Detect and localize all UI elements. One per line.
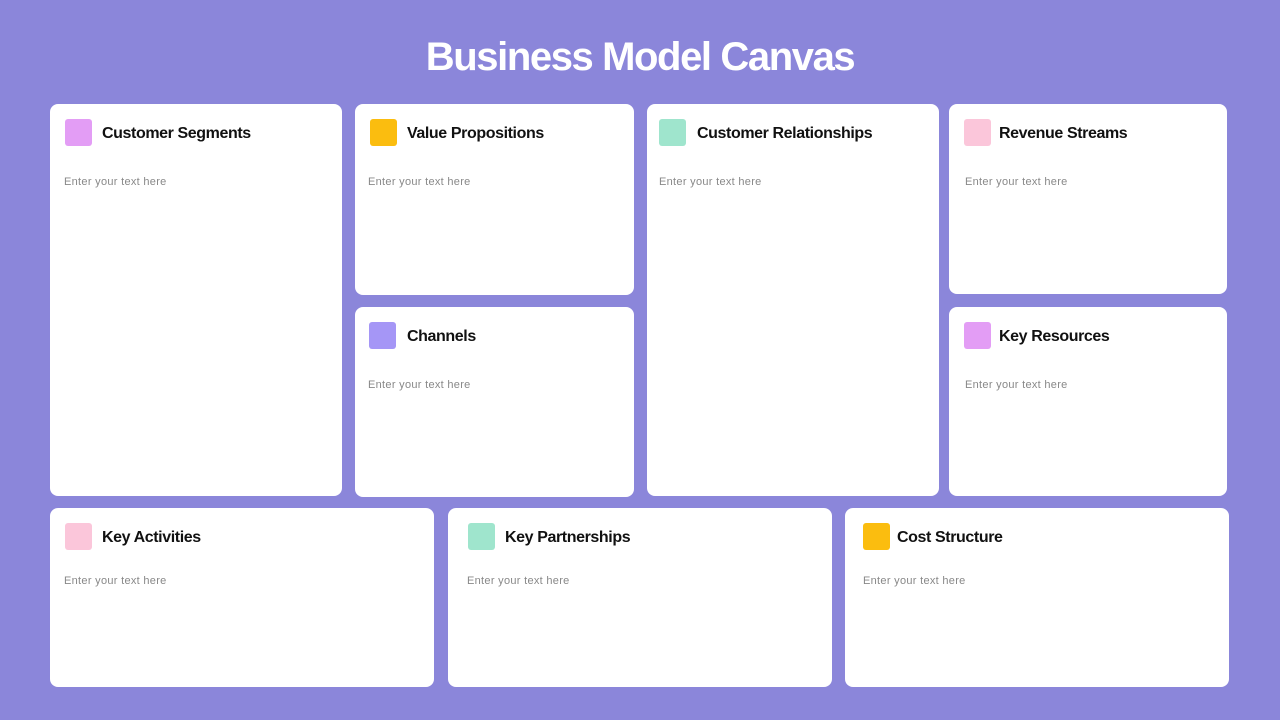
panel: key partnerships: Enter your text here xyxy=(467,575,570,587)
panel: value propositions: Enter your text here xyxy=(368,176,471,188)
panel: key partnerships: Key Partnerships xyxy=(505,529,630,546)
panel: key resources: Key Resources xyxy=(999,328,1109,345)
panel: customer segments: Enter your text here xyxy=(64,176,167,188)
panel: customer segments xyxy=(50,104,342,496)
panel: channels xyxy=(355,307,634,497)
panel: customer relationships: Customer Relationships xyxy=(697,125,872,142)
panel: key activities: Key Activities xyxy=(102,529,201,546)
panel: key partnerships xyxy=(448,508,832,687)
panel: channels: Channels xyxy=(407,328,476,345)
panel: revenue streams: Revenue Streams xyxy=(999,125,1127,142)
panel: key activities xyxy=(50,508,434,687)
panel: value propositions xyxy=(355,104,634,295)
panel: key activities: Enter your text here xyxy=(64,575,167,587)
panel: customer relationships xyxy=(647,104,939,496)
panel: customer relationships: Enter your text here xyxy=(659,176,762,188)
title: Business Model Canvas xyxy=(426,35,854,79)
panel: customer segments: Customer Segments xyxy=(102,125,251,142)
panel: revenue streams xyxy=(949,104,1227,294)
panel: key resources: Enter your text here xyxy=(965,379,1068,391)
panel: cost structure xyxy=(845,508,1229,687)
panel: key resources xyxy=(949,307,1227,496)
panel: channels: Enter your text here xyxy=(368,379,471,391)
panel: cost structure: Enter your text here xyxy=(863,575,966,587)
panel: value propositions: Value Propositions xyxy=(407,125,544,142)
panel: revenue streams: Enter your text here xyxy=(965,176,1068,188)
panel: cost structure: Cost Structure xyxy=(897,529,1003,546)
